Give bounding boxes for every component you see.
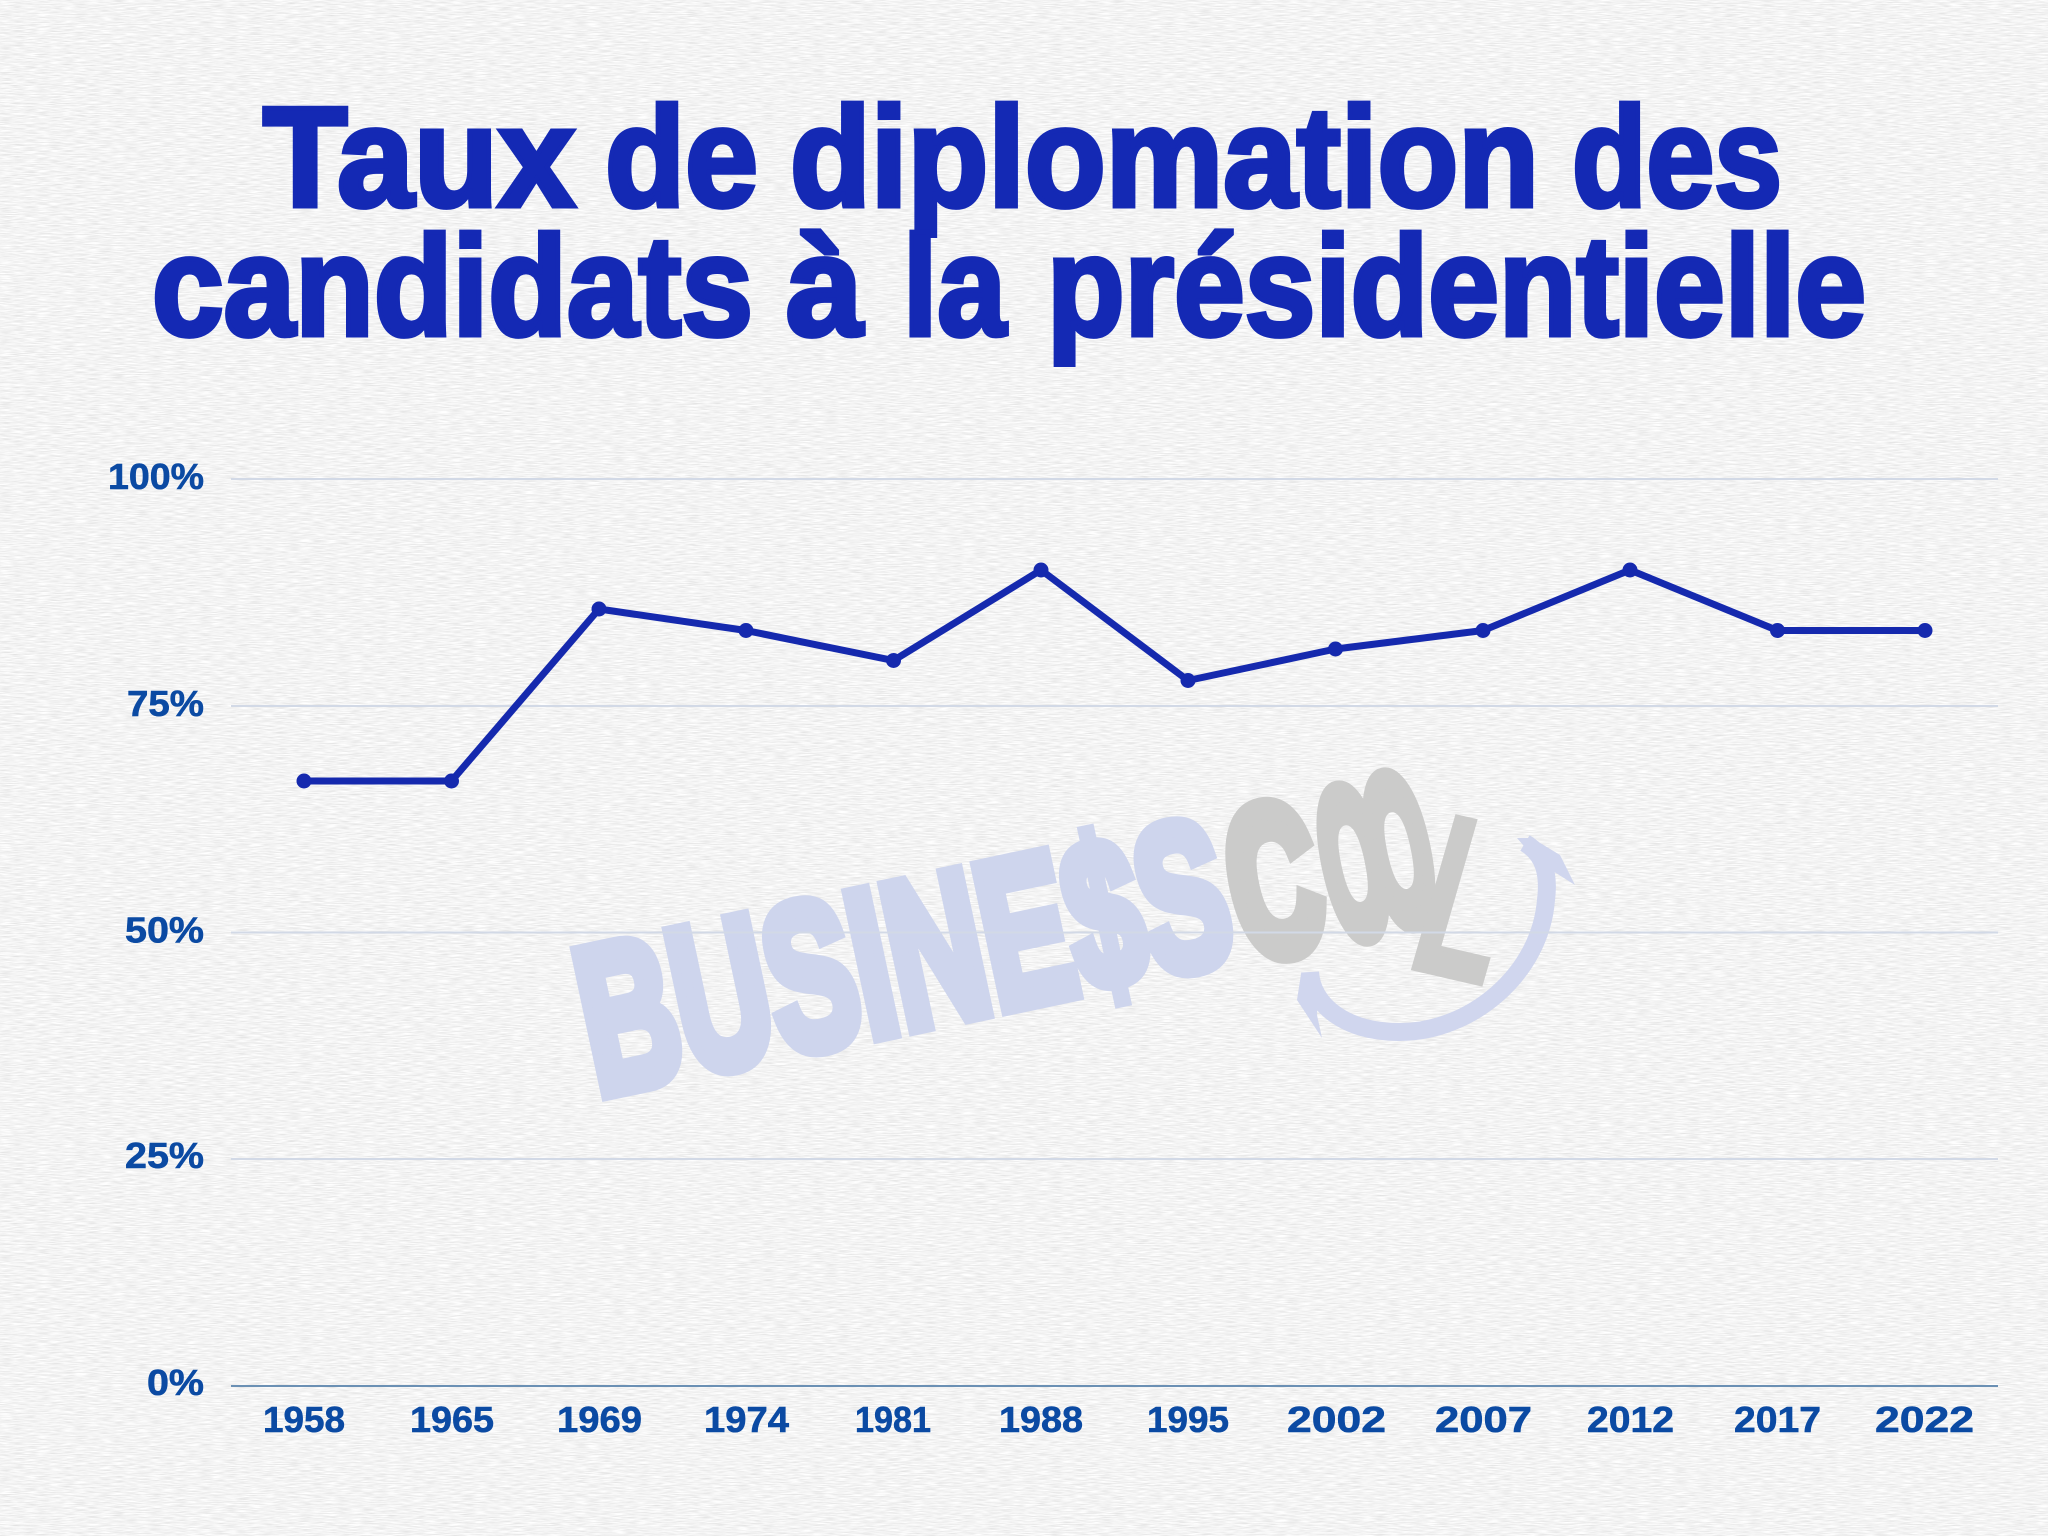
y axis labels: 25% <box>125 1135 204 1176</box>
x axis labels: 1995 <box>1147 1399 1229 1440</box>
x axis labels: 1988 <box>999 1399 1083 1440</box>
y axis labels: 0% <box>147 1362 204 1403</box>
x axis line <box>231 1385 1998 1387</box>
watermark word: COOL: O <box>1299 745 1407 984</box>
title line 2: à <box>786 207 864 366</box>
title line 1: de <box>605 78 758 237</box>
title line 2: candidats <box>152 207 753 366</box>
title line 2: la <box>903 207 1007 366</box>
title line 2 <box>152 207 1866 366</box>
title line 1: diplomation <box>790 78 1539 237</box>
watermark word: BUSINE$S: BUSINE$S <box>558 775 1249 1138</box>
x axis labels: 1965 <box>410 1399 494 1440</box>
title line 2: présidentielle <box>1047 207 1866 366</box>
x axis labels: 2017 <box>1734 1399 1821 1440</box>
y axis labels <box>108 456 204 1403</box>
watermark word: COOL: C <box>1207 759 1341 1004</box>
x axis labels: 2012 <box>1587 1399 1674 1440</box>
y axis labels: 100% <box>108 456 204 497</box>
watermark smile arrow <box>1297 838 1575 1038</box>
title line 1: des <box>1572 78 1782 237</box>
title line 1 <box>263 78 1782 237</box>
watermark word: COOL: O <box>1345 732 1453 971</box>
gridlines <box>231 479 1998 1159</box>
x axis labels: 1981 <box>855 1399 931 1440</box>
watermark word: COOL: L <box>1391 767 1543 1032</box>
watermark: Business Cool logo <box>558 732 1575 1138</box>
x axis labels: 2007 <box>1435 1399 1532 1440</box>
y axis labels: 75% <box>127 683 204 724</box>
data line <box>304 570 1925 781</box>
chart <box>108 456 1998 1440</box>
x axis labels <box>263 1399 1974 1440</box>
x axis labels: 2022 <box>1875 1399 1974 1440</box>
data points <box>296 562 1932 788</box>
watermark word: COOL <box>1207 732 1543 1032</box>
x axis labels: 1958 <box>263 1399 345 1440</box>
y axis labels: 50% <box>125 910 204 950</box>
x axis labels: 1969 <box>557 1399 642 1440</box>
x axis labels: 2002 <box>1287 1399 1386 1440</box>
title <box>152 78 1866 366</box>
title line 1: Taux <box>263 78 575 237</box>
x axis labels: 1974 <box>704 1399 789 1440</box>
